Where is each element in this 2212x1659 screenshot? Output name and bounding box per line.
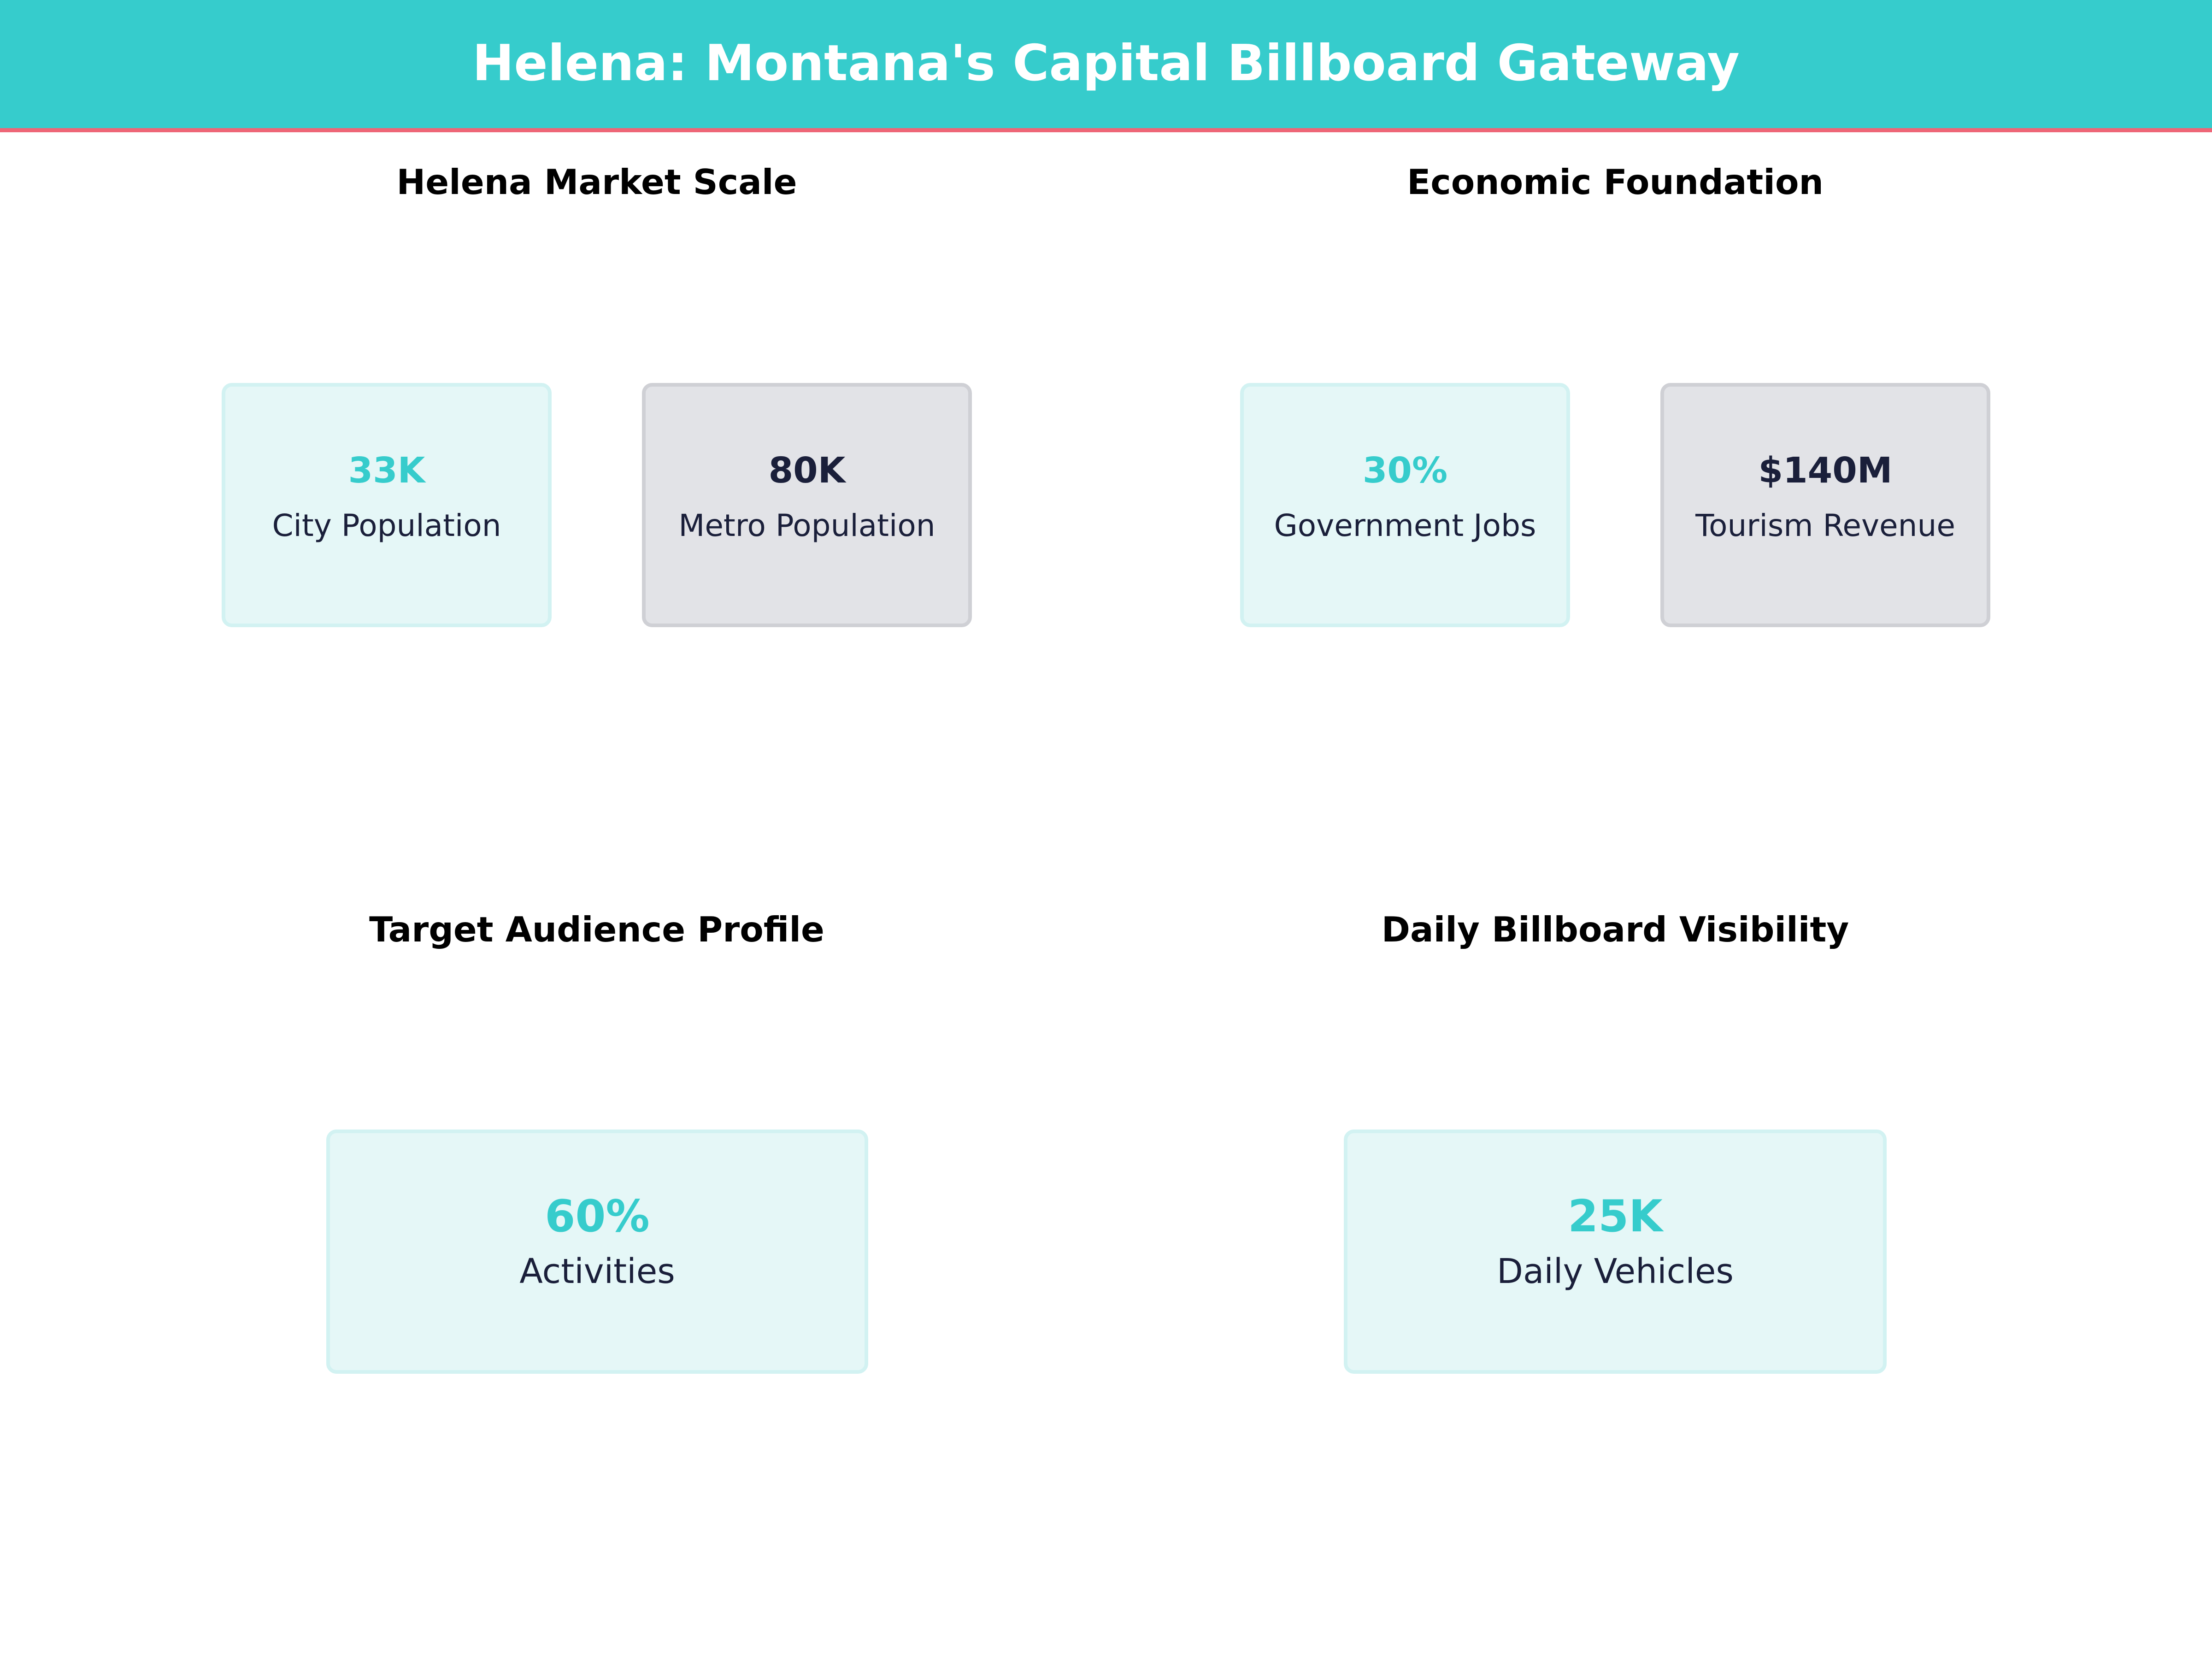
header banner — [0, 0, 2212, 132]
card: metro population: 80K — [769, 450, 845, 491]
card: daily vehicles: 25K — [1568, 1191, 1663, 1242]
heading: Helena Market Scale — [397, 162, 797, 202]
heading: Daily Billboard Visibility — [1382, 909, 1849, 950]
card: city population: 33K — [348, 450, 425, 491]
heading: Target Audience Profile — [369, 909, 824, 950]
card: government jobs: 30% — [1363, 450, 1447, 491]
card: tourism revenue — [1660, 383, 1990, 627]
card: government jobs: Government Jobs — [1274, 508, 1536, 543]
card: activities — [326, 1130, 868, 1374]
card: tourism revenue: Tourism Revenue — [1695, 508, 1955, 543]
card: daily vehicles: Daily Vehicles — [1497, 1252, 1734, 1291]
panel: Economic Foundation — [1240, 157, 1991, 631]
card: city population — [222, 383, 552, 627]
card: activities: Activities — [519, 1252, 675, 1291]
card: metro population — [642, 383, 972, 627]
panel: Helena Market Scale — [221, 157, 972, 631]
card: government jobs — [1240, 383, 1570, 627]
card: city population: City Population — [272, 508, 501, 543]
card: activities: 60% — [545, 1191, 650, 1242]
panel: Target Audience Profile — [221, 903, 972, 1378]
panel: Daily Billboard Visibility — [1240, 903, 1991, 1378]
card: daily vehicles — [1344, 1130, 1887, 1374]
title: Helena: Montana's Capital Billboard Gateway — [472, 35, 1740, 92]
card: metro population: Metro Population — [678, 508, 935, 543]
card: tourism revenue: $140M — [1759, 450, 1892, 491]
heading: Economic Foundation — [1407, 162, 1824, 202]
